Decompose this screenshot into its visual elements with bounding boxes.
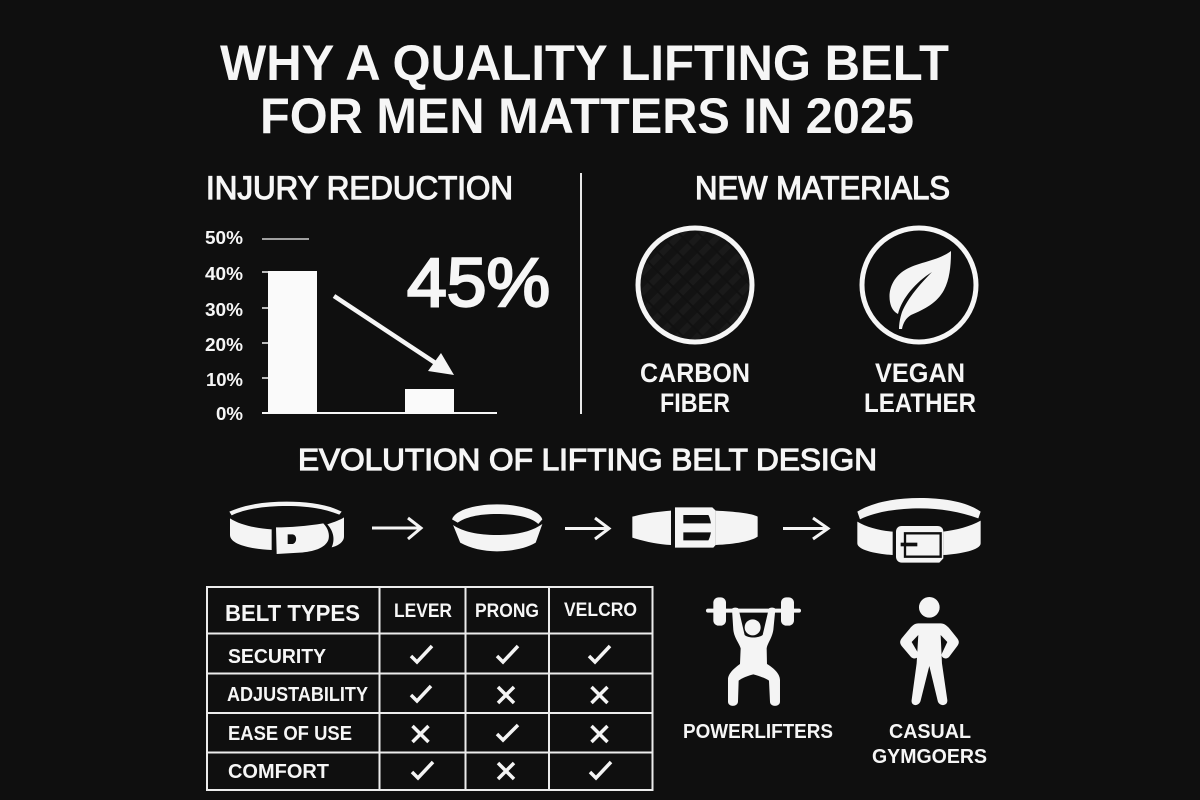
label: carbon fiber: FIBER [660, 388, 730, 418]
bar: after [405, 389, 454, 414]
label: vegan leather: LEATHER [864, 388, 976, 418]
table row labels: ADJUSTABILITY [227, 684, 369, 706]
table grid [207, 587, 652, 790]
icon: casual gymgoer [900, 597, 959, 705]
y-axis labels: 30% [205, 300, 243, 320]
label: vegan leather: VEGAN [875, 358, 965, 388]
arrow 1 [372, 518, 421, 539]
panel: new materials [638, 170, 976, 418]
arrow: decline [334, 296, 454, 375]
heading: evolution of lifting belt design: EVOLUTION OF LIFTING BELT DESIGN [298, 442, 877, 477]
arrow 2 [565, 518, 609, 539]
table header: LEVER [394, 601, 452, 622]
icon: belt 3 [632, 507, 758, 548]
table marks [411, 646, 611, 779]
title [220, 35, 949, 144]
label: carbon fiber [640, 358, 750, 418]
icon: belt 4 [857, 498, 981, 563]
icon: belt 2 [452, 504, 542, 551]
icon: carbon fiber [638, 228, 752, 342]
table header [225, 600, 637, 626]
table row labels: COMFORT [228, 761, 329, 783]
comparison table: belt types [207, 587, 652, 790]
label: vegan leather [864, 358, 976, 418]
divider [580, 173, 582, 414]
label: carbon fiber: CARBON [640, 358, 750, 388]
title: FOR MEN MATTERS IN 2025 [260, 88, 914, 144]
y-axis labels: 0% [216, 404, 243, 424]
icon: belt 1 [229, 502, 344, 554]
heading: new materials: NEW MATERIALS [695, 170, 950, 206]
label: powerlifters: POWERLIFTERS [683, 721, 833, 743]
arrow 3 [783, 518, 828, 539]
panel: injury reduction [205, 170, 550, 424]
y-axis labels: 20% [205, 335, 243, 355]
table row labels: SECURITY [228, 646, 327, 668]
label: casual gymgoers [872, 721, 987, 768]
table header: PRONG [475, 601, 539, 622]
table row labels [227, 646, 369, 783]
bar chart [205, 228, 497, 424]
icon: powerlifter [706, 597, 801, 706]
icon: vegan leather leaf [862, 228, 976, 342]
bar: before [268, 271, 317, 413]
y-axis labels: 40% [205, 264, 243, 284]
y-axis labels [205, 228, 243, 424]
label: casual gymgoers: CASUAL [889, 721, 971, 743]
belt evolution timeline [229, 498, 981, 563]
title: WHY A QUALITY LIFTING BELT [220, 35, 949, 91]
heading: injury reduction: INJURY REDUCTION [206, 170, 513, 206]
label: casual gymgoers: GYMGOERS [872, 746, 987, 768]
y-axis labels: 50% [205, 228, 243, 248]
table header: BELT TYPES [225, 600, 360, 626]
table row labels: EASE OF USE [228, 723, 352, 745]
y-axis labels: 10% [206, 370, 243, 390]
stat: 45%: 45% [407, 244, 550, 321]
table header: VELCRO [564, 600, 637, 621]
